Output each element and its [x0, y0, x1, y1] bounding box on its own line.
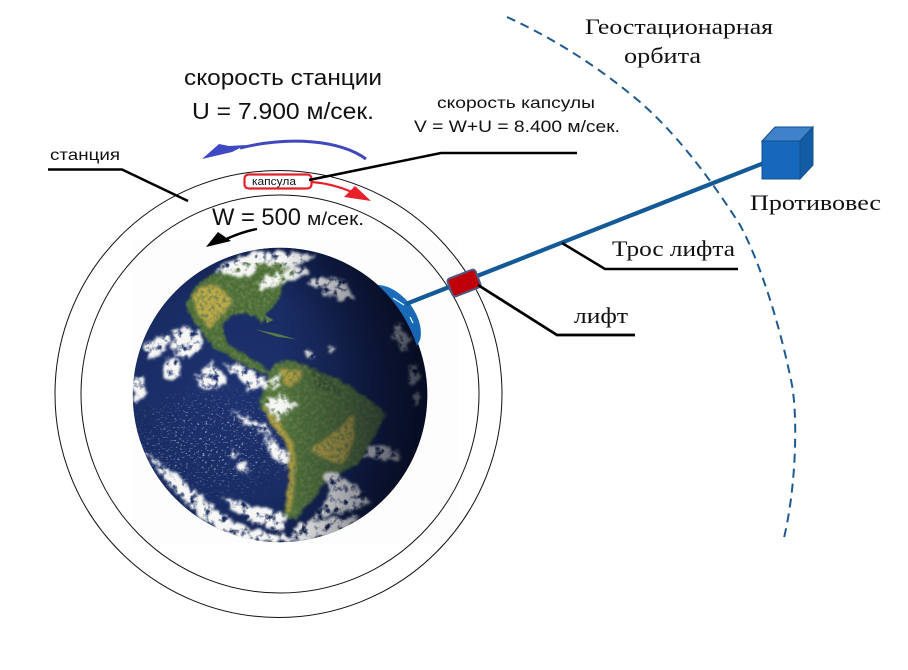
arrow: capsule velocity — [312, 182, 371, 201]
capsule label: капсула — [252, 176, 297, 188]
counterweight cube — [762, 127, 813, 179]
label: capsule speed: V = W+U = 8.400 м/сек. — [414, 118, 620, 136]
label: station speed: скорость станции — [184, 65, 382, 90]
label: station speed: U = 7.900 м/сек. — [192, 98, 374, 124]
label: relative speed W: м/сек. — [307, 209, 364, 229]
label: geostationary orbit: орбита — [624, 43, 701, 68]
leader line: station — [48, 170, 188, 201]
label: geostationary orbit — [585, 14, 773, 68]
label: geostationary orbit: Геостационарная — [585, 14, 773, 39]
ocean cloud specks — [134, 385, 290, 504]
leader line: elevator — [478, 285, 635, 335]
label: station speed — [184, 65, 382, 124]
label: tether: Трос лифта — [612, 236, 735, 261]
label: counterweight: Противовес — [750, 190, 881, 215]
geostationary orbit arc — [507, 17, 795, 542]
label: station: станция — [50, 147, 120, 164]
leader line: tether — [562, 243, 738, 269]
elevator dome base — [378, 285, 421, 346]
arrow: station velocity — [202, 141, 366, 159]
label: elevator: лифт — [574, 303, 628, 328]
arrow: W direction — [206, 229, 257, 247]
caribbean islands — [255, 315, 297, 339]
inner station ring — [81, 195, 479, 593]
label: capsule speed: скорость капсулы — [437, 95, 595, 112]
label: relative speed W — [212, 204, 364, 231]
continents — [187, 262, 385, 518]
night shade — [286, 248, 428, 542]
image backdrop — [131, 240, 458, 543]
label: capsule speed — [414, 95, 620, 136]
elevator tether — [406, 163, 764, 304]
label: relative speed W: W = 500 — [212, 204, 301, 231]
earth globe — [130, 240, 430, 547]
elevator cabin — [447, 269, 481, 297]
leader line: capsule — [309, 153, 577, 180]
outer station ring — [55, 170, 502, 618]
capsule label — [244, 174, 312, 188]
clouds — [133, 251, 420, 542]
